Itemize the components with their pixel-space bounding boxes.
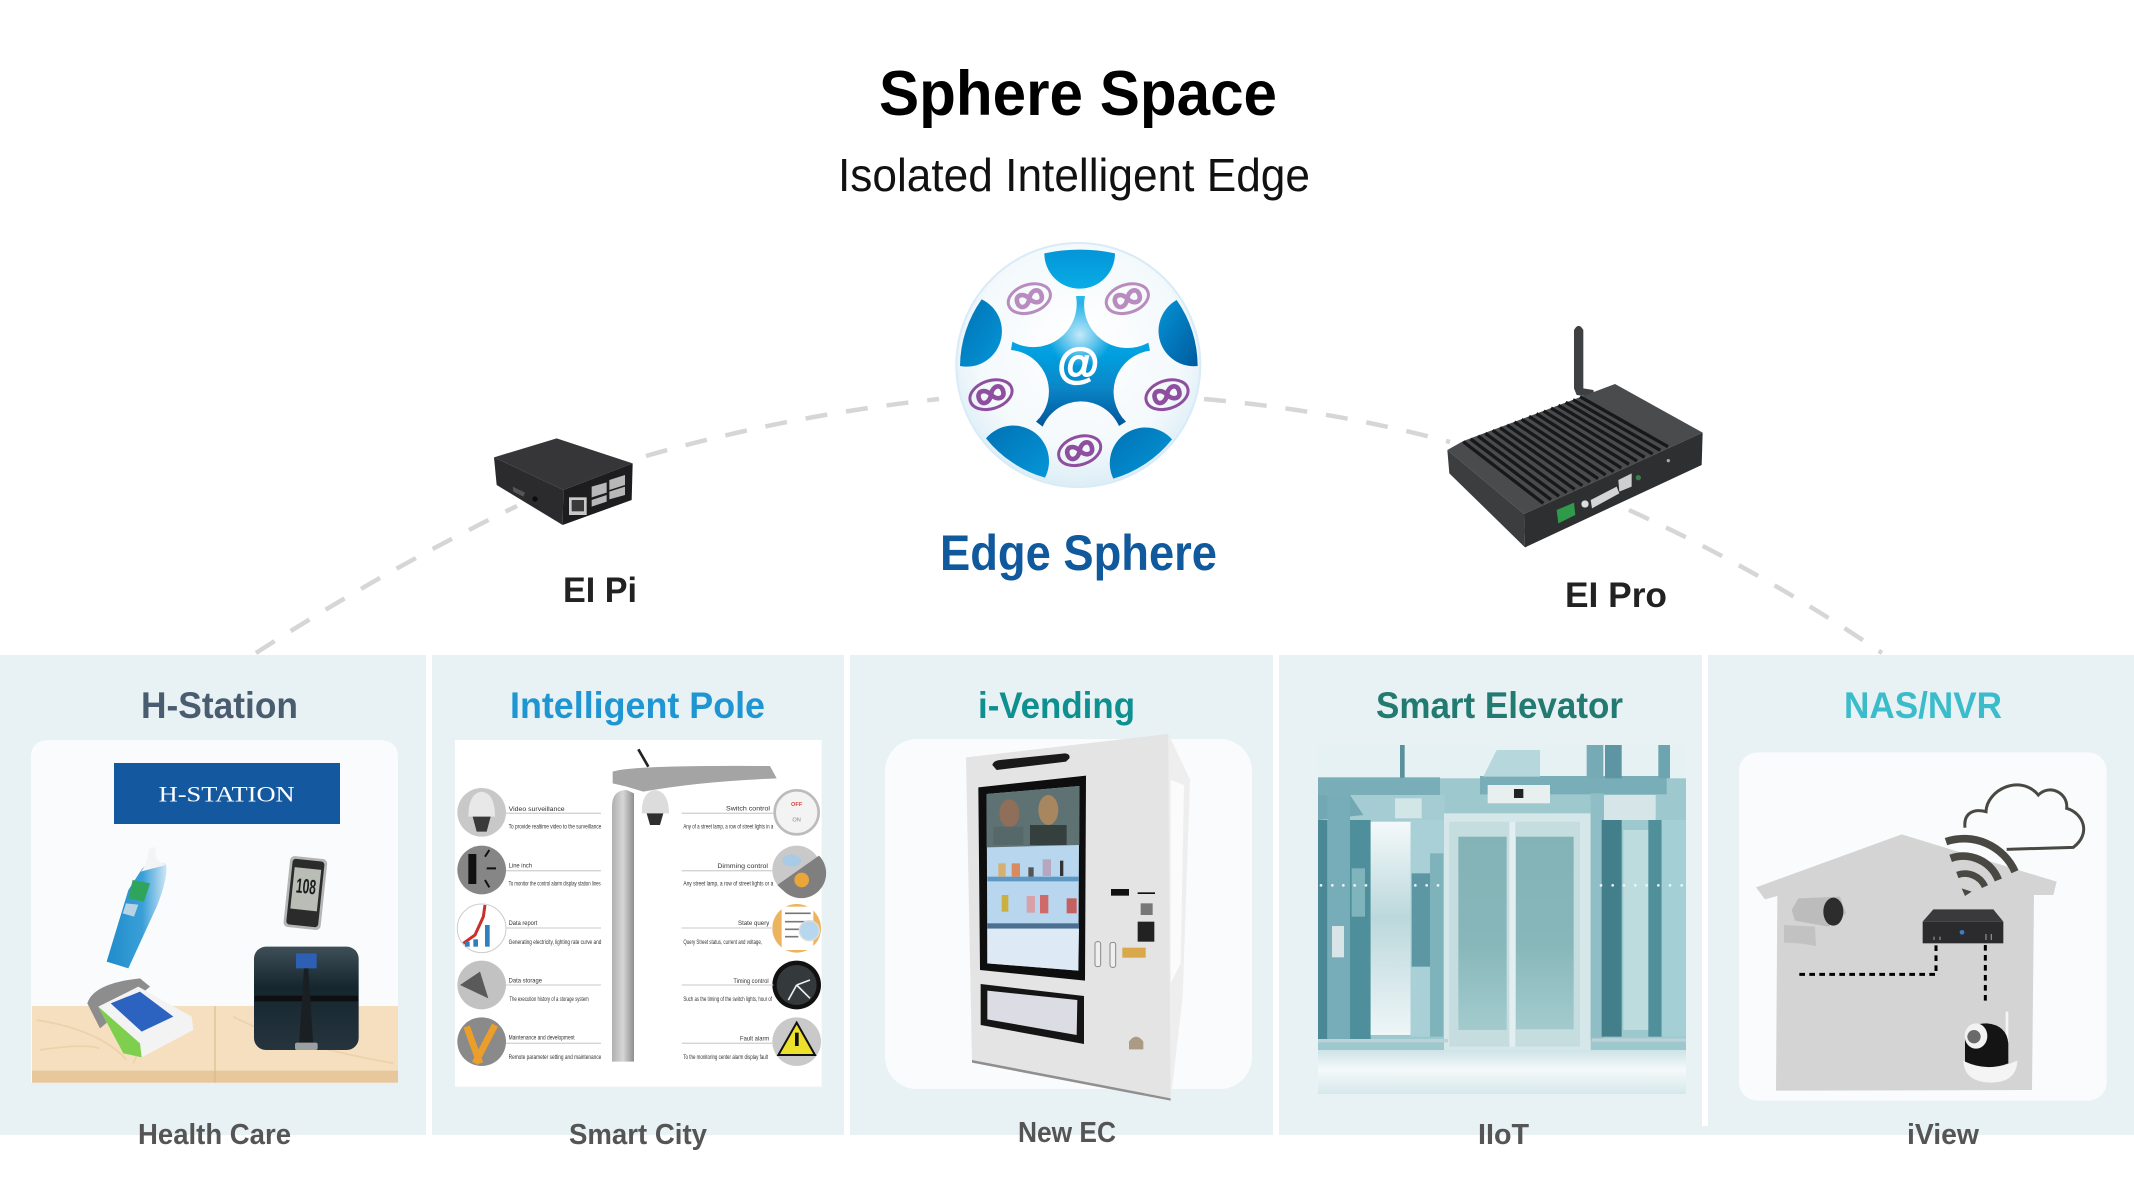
icon: wifi signal xyxy=(1946,839,2015,896)
icon: glucose meter xyxy=(283,856,328,930)
icon: bullet camera xyxy=(1784,897,1846,946)
wood table xyxy=(32,1006,398,1083)
icon: NAS box xyxy=(1923,909,2003,943)
label: IIoT: IIoT xyxy=(1478,1119,1529,1151)
heading: Intelligent Pole: Intelligent Pole xyxy=(510,685,765,726)
icon: dome camera xyxy=(1963,1012,2017,1083)
label: New EC: New EC xyxy=(1018,1117,1116,1149)
icon: Edge Sphere globe xyxy=(956,243,1200,487)
heading: H-Station: H-Station xyxy=(141,685,298,726)
right feature icons: OFF xyxy=(791,802,803,808)
feature text left: Line inch xyxy=(509,864,532,870)
pole xyxy=(612,749,777,1062)
feature text left: To monitor the control alarm display station lines xyxy=(509,882,601,888)
panel: Intelligent Pole xyxy=(432,655,844,1135)
feature text left xyxy=(509,807,602,1061)
label: Smart City: Smart City xyxy=(569,1119,707,1151)
heading: Edge Sphere: Edge Sphere xyxy=(940,525,1217,581)
feature text right: Such as the timing of the switch lights, hour of xyxy=(683,997,772,1003)
feature text left: Data report xyxy=(509,921,538,927)
subtitle: Isolated Intelligent Edge xyxy=(838,149,1310,201)
dashed arc: EI Pro to right panel xyxy=(1629,510,1882,653)
feature text right: State query xyxy=(738,921,769,927)
label: Health Care: Health Care xyxy=(138,1119,291,1151)
feature text left: Video surveillance xyxy=(509,807,565,813)
heading: i-Vending: i-Vending xyxy=(978,685,1135,726)
icon: EI Pro device xyxy=(1447,326,1703,547)
panel: i-Vending xyxy=(850,655,1273,1135)
card: H-Station health devices xyxy=(31,740,398,1083)
dashed arc: Edge Sphere to EI Pro xyxy=(1204,399,1450,442)
card: Intelligent Pole feature diagram xyxy=(455,740,826,1087)
icon: cloud xyxy=(1965,785,2084,849)
feature text right: Dimming control xyxy=(717,864,768,870)
feature lines xyxy=(506,813,773,1043)
feature text right: Any street lamp, a row of street lights or a xyxy=(683,882,774,888)
vending touch screen xyxy=(978,776,1086,981)
feature text left: Generating electricity, lighting rate curve and xyxy=(509,940,601,946)
dashed connection lines xyxy=(1799,945,1985,1003)
feature text left: The execution history of a storage system xyxy=(509,997,589,1003)
dashed arc: left segment to EI Pi xyxy=(256,506,517,653)
banner: H-STATION xyxy=(114,763,340,824)
feature text right: Fault alarm xyxy=(740,1036,769,1042)
left feature icons xyxy=(457,788,506,1066)
feature text right: Timing control xyxy=(733,979,769,985)
feature text left: Maintenance and development xyxy=(509,1035,575,1041)
banner: H-STATION: H-STATION xyxy=(159,782,295,807)
icon: glucose meter: 108 xyxy=(295,874,317,899)
feature text right: To the monitoring center alarm display fault xyxy=(683,1055,768,1061)
feature text right: Switch control xyxy=(726,807,770,813)
icon: body scale xyxy=(254,947,359,1050)
label: EI Pro: EI Pro xyxy=(1565,576,1667,615)
card: i-Vending white backing xyxy=(885,739,1252,1089)
icon: Edge Sphere globe: @ xyxy=(1058,339,1099,387)
icon: ear thermometer xyxy=(107,847,166,968)
feature text left: To provide realtime video to the surveillance xyxy=(509,825,602,831)
title: Sphere Space xyxy=(879,59,1277,129)
heading: NAS/NVR: NAS/NVR xyxy=(1844,685,2002,726)
icon: EI Pi device xyxy=(494,438,633,525)
heading: Smart Elevator: Smart Elevator xyxy=(1376,685,1623,726)
right feature icons xyxy=(772,790,826,1066)
right feature icons: ON xyxy=(792,817,801,823)
feature text right: Query Street status, current and voltage, xyxy=(683,940,762,946)
vending pickup window xyxy=(981,984,1084,1044)
feature text left: Data storage xyxy=(509,978,543,984)
label: iView: iView xyxy=(1907,1119,1979,1151)
house silhouette xyxy=(1756,834,2057,1091)
icon: vending machine xyxy=(966,734,1190,1101)
panel: NAS/NVR xyxy=(1708,655,2134,1135)
photo: Smart Elevator xyxy=(1318,745,1686,1094)
feature text left: Remote parameter setting and maintenance xyxy=(509,1055,602,1061)
panel: H-Station xyxy=(0,655,426,1135)
panel: Smart Elevator xyxy=(1279,655,1708,1135)
label: EI Pi: EI Pi xyxy=(563,571,637,610)
icon: blood pressure monitor xyxy=(87,978,193,1057)
feature text right xyxy=(683,807,774,1061)
dashed arc: EI Pi to Edge Sphere xyxy=(646,399,939,456)
card: NAS/NVR home network xyxy=(1739,752,2107,1101)
feature text right: Any of a street lamp, a row of street lights in a xyxy=(683,825,774,831)
